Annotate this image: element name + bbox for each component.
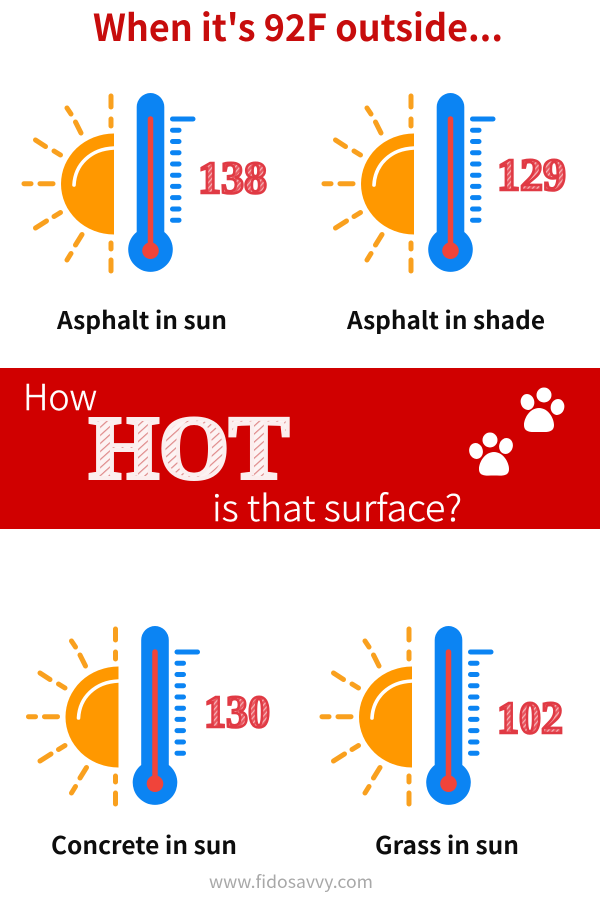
value: 138: 138 <box>198 152 267 203</box>
panel: asphalt in shade <box>324 93 566 336</box>
icon: paw print lower <box>467 432 515 476</box>
icon: paw print upper <box>519 388 566 432</box>
banner text: How: How <box>23 369 97 421</box>
panel: concrete in sun <box>28 626 270 861</box>
banner text: is that surface: is that surface? <box>212 480 462 532</box>
value: 130: 130 <box>204 686 270 737</box>
value: 102: 102 <box>497 692 563 743</box>
label: asphalt in shade: Asphalt in shade <box>346 301 545 336</box>
banner word: HOT: HOT <box>89 399 289 498</box>
value: 129: 129 <box>497 149 566 200</box>
label: asphalt in sun: Asphalt in sun <box>56 301 227 336</box>
icon: sun and thermometer <box>28 626 198 805</box>
banner <box>0 368 600 532</box>
icon: sun and thermometer <box>24 93 193 272</box>
label: concrete in sun: Concrete in sun <box>51 826 237 861</box>
icon: sun and thermometer <box>324 93 493 272</box>
icon: sun and thermometer <box>322 626 491 805</box>
panel: asphalt in sun <box>24 93 267 336</box>
panel: grass in sun <box>322 626 563 861</box>
label: grass in sun: Grass in sun <box>375 826 519 861</box>
footer url: www.fidosavvy.com <box>209 868 373 893</box>
